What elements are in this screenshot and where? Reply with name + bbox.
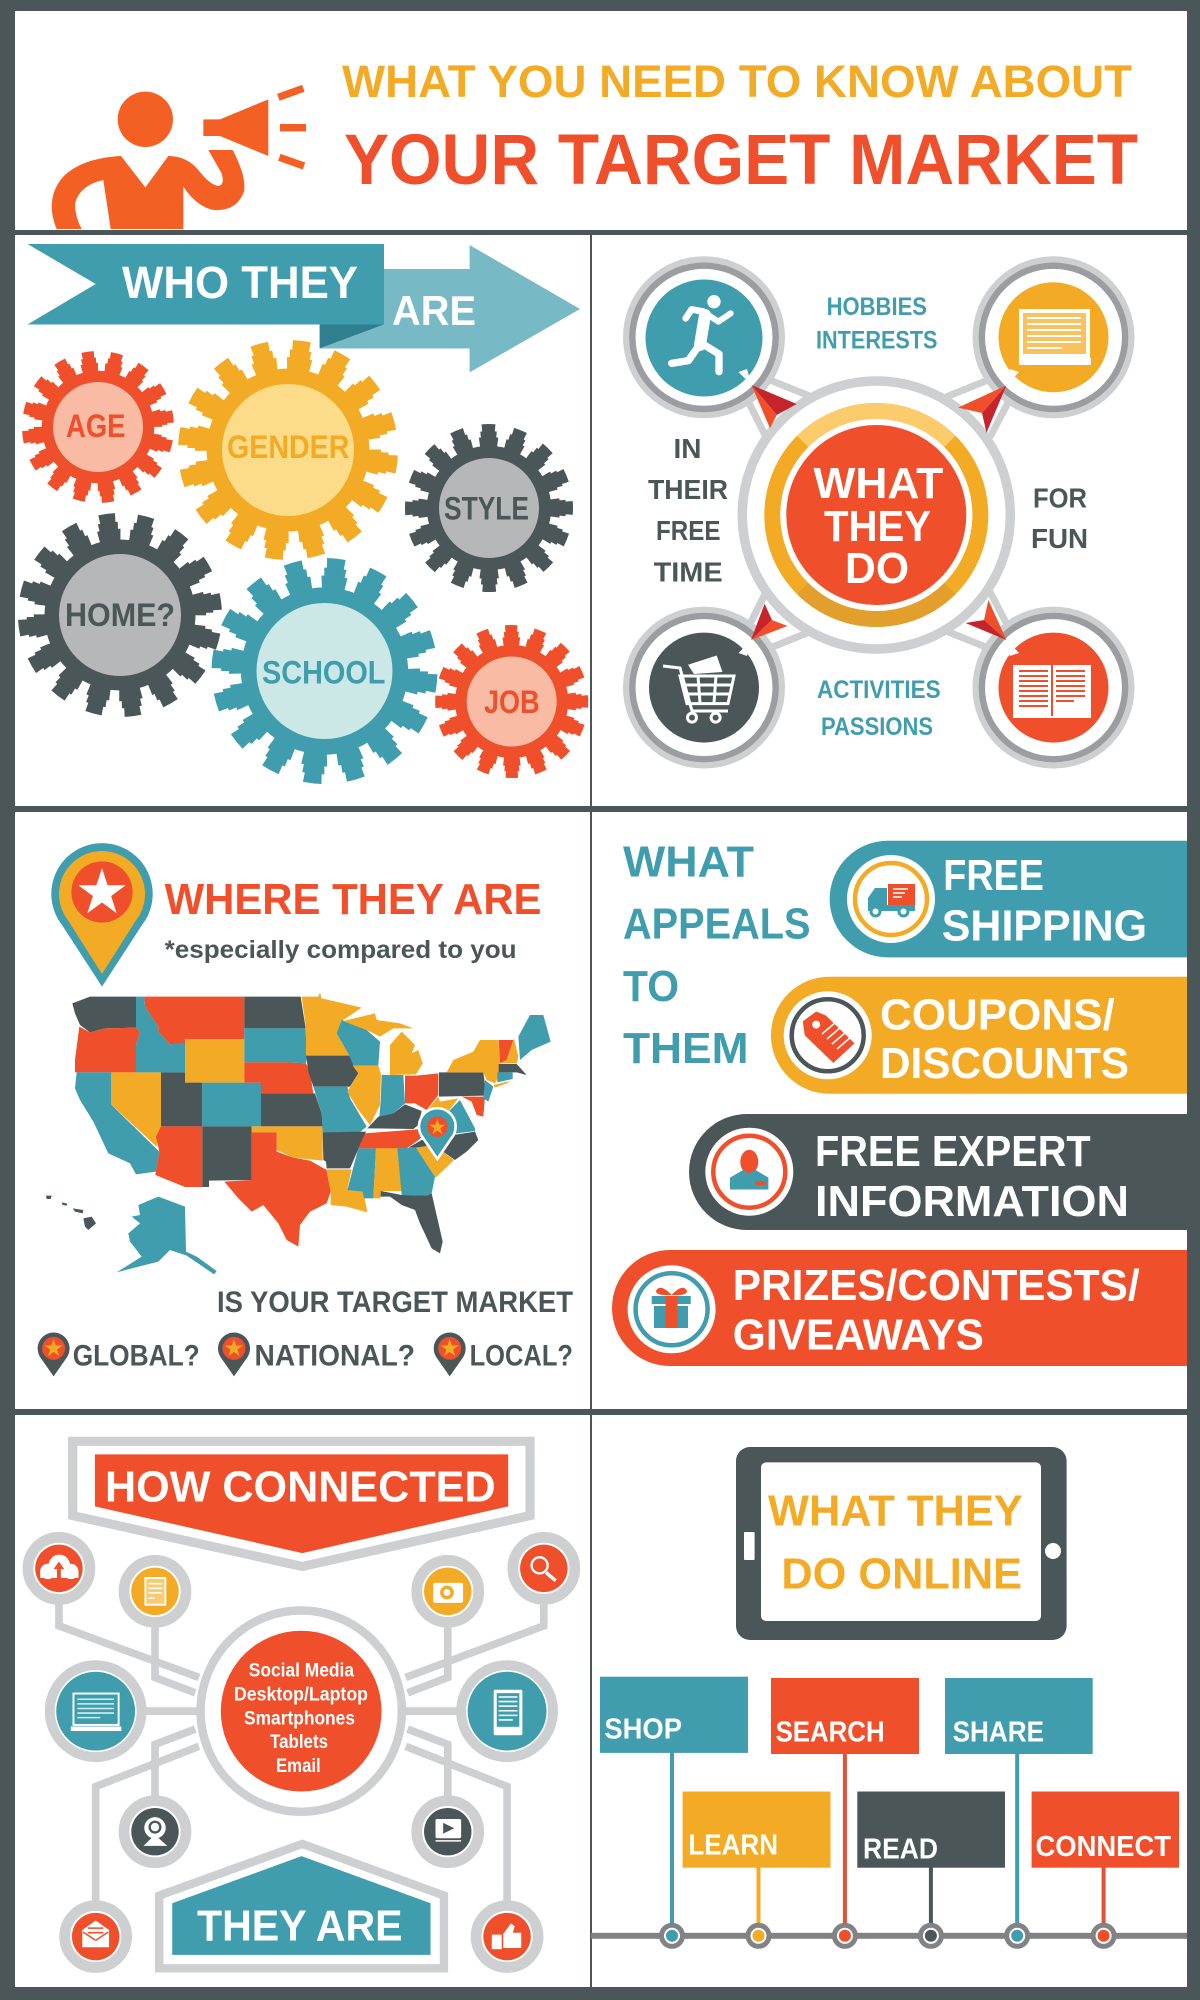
icon: envelope bbox=[65, 1906, 127, 1968]
bar: free shipping: SHIPPING bbox=[942, 901, 1147, 950]
flag: learn bbox=[683, 1792, 830, 1946]
gear: home bbox=[16, 511, 224, 719]
eastern states bbox=[302, 992, 551, 1253]
gear: school: SCHOOL bbox=[262, 655, 385, 691]
center hub: what they do bbox=[742, 381, 1010, 649]
arrows: red pointers to icons bbox=[738, 369, 1019, 656]
icon: runner bbox=[626, 259, 782, 415]
option: global bbox=[38, 1333, 200, 1376]
tablet heading: DO ONLINE bbox=[781, 1550, 1022, 1599]
icon: thumbs up bbox=[476, 1906, 538, 1968]
footer banner bbox=[172, 1856, 431, 1955]
icon: camera bbox=[417, 1560, 479, 1622]
heading arrow: are: ARE bbox=[392, 287, 476, 334]
icon: laptop bbox=[50, 1665, 142, 1757]
bar: coupons discounts: DISCOUNTS bbox=[880, 1039, 1129, 1088]
icon: person with megaphone bbox=[52, 88, 306, 229]
flag: learn: LEARN bbox=[688, 1830, 778, 1862]
list: connection types: Smartphones bbox=[244, 1708, 355, 1730]
flag: search: SEARCH bbox=[776, 1716, 885, 1748]
gear: age bbox=[21, 350, 175, 504]
icon: laptop bbox=[976, 259, 1132, 415]
icon: video player bbox=[417, 1801, 479, 1863]
heading: what appeals to them: WHAT bbox=[623, 837, 754, 886]
panel: what appeals to them bbox=[612, 837, 1187, 1366]
label: hobbies interests: HOBBIES bbox=[827, 293, 927, 321]
list: connection types: Email bbox=[276, 1756, 321, 1777]
bar: free shipping: FREE bbox=[943, 851, 1044, 900]
option: national: NATIONAL? bbox=[254, 1339, 415, 1372]
list: connection types: Desktop/Laptop bbox=[234, 1684, 368, 1705]
icon: document bbox=[124, 1560, 186, 1622]
heading: what appeals to them: APPEALS bbox=[623, 899, 810, 948]
panel: who they are bbox=[16, 244, 598, 788]
gear: job: JOB bbox=[484, 684, 540, 720]
footer frame bbox=[159, 1844, 444, 1968]
option: national bbox=[218, 1333, 415, 1376]
label: hobbies interests: INTERESTS bbox=[816, 326, 938, 354]
center hub: what they do: THEY bbox=[824, 502, 931, 551]
label: in their free time: IN bbox=[674, 433, 701, 464]
gear: gender bbox=[176, 338, 400, 562]
flag: connect: CONNECT bbox=[1036, 1831, 1171, 1863]
bar: free shipping bbox=[830, 841, 1187, 957]
center circle bbox=[201, 1610, 402, 1812]
gear: job bbox=[426, 616, 598, 787]
connector lines bbox=[59, 1603, 544, 1901]
heading ribbon: who they: WHO THEY bbox=[122, 257, 358, 308]
tablet heading bbox=[736, 1447, 1067, 1640]
gear: home: HOME? bbox=[65, 597, 175, 633]
list: connection types: Tablets bbox=[270, 1732, 328, 1753]
heading: how connected: HOW CONNECTED bbox=[105, 1462, 496, 1511]
question: is your target market: IS YOUR TARGET MARKET bbox=[217, 1286, 573, 1319]
panel: header bbox=[52, 56, 1138, 229]
panel: what they do bbox=[626, 259, 1132, 766]
icon: tablet bbox=[461, 1665, 553, 1757]
heading ribbon: who they bbox=[28, 244, 384, 348]
connector lines bbox=[745, 376, 1012, 652]
list: connection types bbox=[234, 1660, 368, 1777]
icon: shopping cart bbox=[626, 610, 782, 766]
heading arrow: are bbox=[320, 245, 580, 372]
flag: read bbox=[857, 1792, 1005, 1946]
title line 2: YOUR TARGET MARKET bbox=[344, 121, 1138, 200]
bar: free expert information bbox=[689, 1114, 1187, 1230]
flag: connect bbox=[1032, 1792, 1179, 1946]
bar: coupons discounts bbox=[771, 977, 1187, 1094]
title line 1: WHAT YOU NEED TO KNOW ABOUT bbox=[342, 56, 1132, 107]
bar: free expert information: FREE EXPERT bbox=[815, 1127, 1091, 1176]
bar: coupons discounts: COUPONS/ bbox=[880, 990, 1115, 1039]
gear: school bbox=[208, 554, 441, 788]
western states bbox=[46, 997, 331, 1274]
label: for fun: FOR bbox=[1033, 482, 1087, 514]
label: for fun bbox=[1031, 482, 1088, 554]
flag: share: SHARE bbox=[953, 1716, 1044, 1748]
gear: style bbox=[395, 414, 583, 602]
map: United States bbox=[46, 992, 551, 1274]
label: in their free time: FREE bbox=[656, 515, 720, 546]
icon: webcam bbox=[124, 1801, 186, 1863]
flag: read: READ bbox=[863, 1834, 938, 1866]
center hub: what they do: DO bbox=[845, 544, 909, 593]
gear: age: AGE bbox=[66, 408, 126, 444]
label: activities passions: PASSIONS bbox=[821, 713, 933, 741]
icon: large location pin bbox=[51, 843, 153, 987]
label: hobbies interests bbox=[816, 293, 938, 354]
panel: what they do online bbox=[591, 1447, 1187, 1946]
bar: prizes contests giveaways bbox=[612, 1250, 1187, 1366]
heading: where they are: WHERE THEY ARE bbox=[165, 875, 542, 924]
flag: search bbox=[771, 1678, 919, 1946]
gear: gender: GENDER bbox=[227, 429, 349, 465]
panel: how connected they are bbox=[28, 1441, 575, 1968]
subheading: *especially compared to you bbox=[165, 936, 517, 964]
icon: magnifying glass bbox=[513, 1537, 575, 1599]
flag: shop bbox=[600, 1677, 748, 1946]
heading frame bbox=[73, 1441, 530, 1566]
bar: prizes contests giveaways: PRIZES/CONTESTS/ bbox=[733, 1261, 1140, 1310]
heading banner bbox=[95, 1454, 508, 1553]
panel: where they are bbox=[38, 843, 573, 1376]
tablet heading: WHAT THEY bbox=[768, 1486, 1023, 1536]
flag: shop: SHOP bbox=[604, 1713, 682, 1745]
heading: they are: THEY ARE bbox=[197, 1901, 403, 1950]
heading: what appeals to them: TO bbox=[623, 962, 679, 1011]
heading: what appeals to them bbox=[623, 837, 810, 1073]
label: in their free time: THEIR bbox=[648, 474, 728, 505]
option: global: GLOBAL? bbox=[73, 1339, 200, 1372]
option: local: LOCAL? bbox=[470, 1339, 573, 1372]
flag: share bbox=[945, 1678, 1093, 1946]
gear: style: STYLE bbox=[444, 490, 529, 526]
heading: what appeals to them: THEM bbox=[623, 1024, 748, 1073]
icon: cloud upload bbox=[28, 1537, 90, 1599]
bar: free expert information: INFORMATION bbox=[815, 1177, 1129, 1226]
icon: open book bbox=[976, 610, 1132, 766]
center hub: what they do: WHAT bbox=[814, 459, 943, 508]
label: activities passions bbox=[817, 676, 941, 741]
label: activities passions: ACTIVITIES bbox=[817, 676, 941, 704]
option: local bbox=[434, 1333, 573, 1376]
timeline base bbox=[591, 1933, 1187, 1939]
network diagram shapes bbox=[28, 1441, 575, 1968]
label: for fun: FUN bbox=[1031, 523, 1088, 554]
list: connection types: Social Media bbox=[249, 1660, 354, 1681]
bar: prizes contests giveaways: GIVEAWAYS bbox=[733, 1311, 984, 1360]
label: in their free time bbox=[648, 433, 728, 588]
label: in their free time: TIME bbox=[654, 556, 723, 588]
